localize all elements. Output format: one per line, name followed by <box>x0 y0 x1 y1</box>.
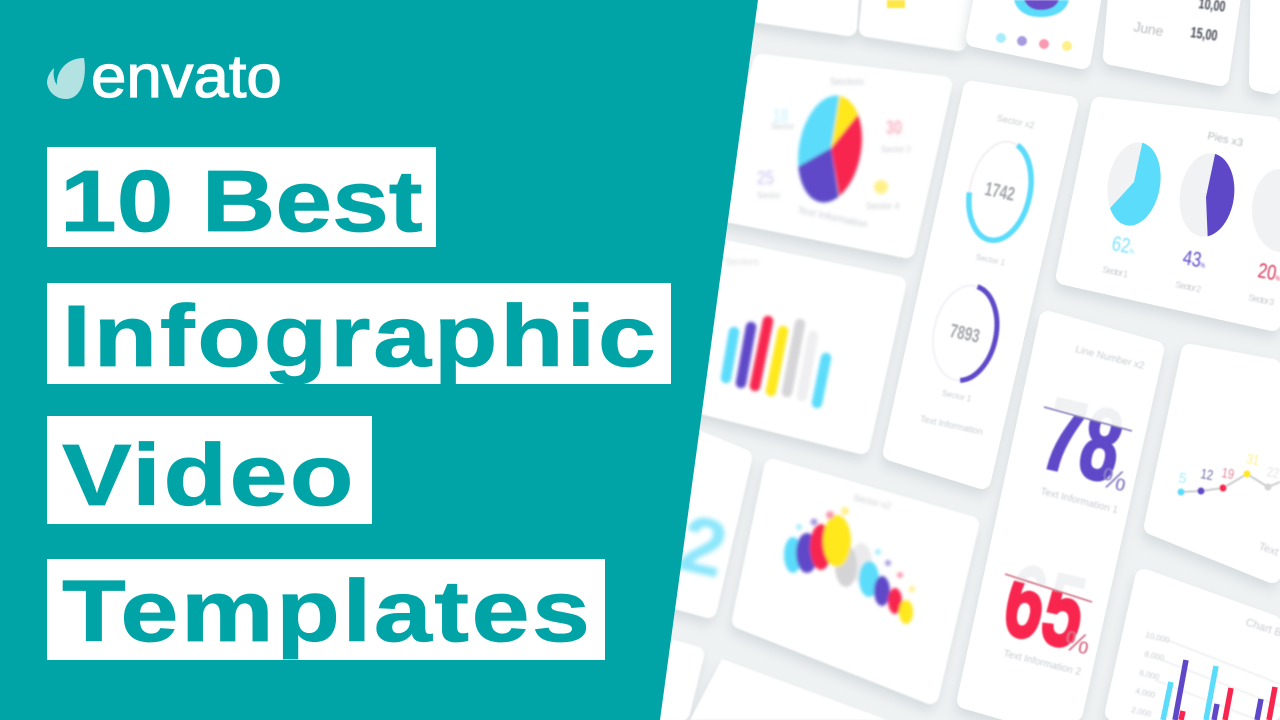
stat: 78 percent: Text Information 1 <box>1039 486 1119 516</box>
stat: 78 percent: Line Number x2 <box>1074 344 1146 372</box>
card with large number 22: 22 <box>628 488 735 595</box>
chart fragment: concentric arcs <box>1014 0 1069 17</box>
stat: 65 percent: Text Information 2 <box>1002 648 1082 678</box>
card shapes, left blurred column <box>640 0 970 720</box>
legend dots <box>996 33 1072 51</box>
stat: 78 percent: % <box>1099 462 1130 497</box>
pie labels: 18 <box>773 106 788 126</box>
pie labels: Sector 2 <box>881 145 911 154</box>
line <box>1181 474 1280 492</box>
pie values and labels <box>1102 130 1280 307</box>
chart fragment: yellow bar <box>887 0 905 8</box>
donut: purple 7893 <box>914 280 1012 437</box>
line chart values: 19 <box>1220 465 1235 482</box>
pie labels: Sector <box>771 122 794 131</box>
donut: purple 7893: Sector 1 <box>941 389 973 404</box>
line chart points <box>1178 470 1272 496</box>
top row card content <box>887 0 1227 51</box>
pie values and labels: 62% <box>1110 231 1137 258</box>
donut progress card <box>914 110 1045 437</box>
axis labels: 8,000 <box>1144 649 1166 663</box>
stat: 65 percent: % <box>1062 625 1093 660</box>
small bubble labels: Sector x2 <box>853 492 892 511</box>
line chart values <box>1177 451 1280 486</box>
pie values and labels: Pies x3 <box>1206 130 1244 149</box>
donut: cyan 1742: 1742 <box>983 179 1017 206</box>
table values <box>1132 0 1227 45</box>
chart fragment: inner arc <box>1024 0 1059 10</box>
pie labels: Sector 4 <box>866 201 900 211</box>
pie: 20 percent <box>1252 169 1280 252</box>
pie labels: Sectors <box>830 77 864 88</box>
grouped bar chart card <box>1131 616 1280 720</box>
pie values and labels: Sector 1 <box>1102 264 1129 279</box>
donut: purple 7893: Text Information <box>919 414 984 437</box>
axis labels: 4,000 <box>1135 686 1157 700</box>
logo: envato <box>47 44 282 111</box>
icon: leaf <box>47 58 85 99</box>
grid lines <box>1155 640 1280 719</box>
donut: cyan 1742: Sector 1 <box>975 253 1006 268</box>
bar card title: Sectors <box>725 257 759 268</box>
pie: 43 percent <box>1180 154 1234 236</box>
axis labels: 2,000 <box>1131 705 1153 719</box>
bar chart card <box>725 257 826 403</box>
stat: 78 percent <box>1042 346 1145 514</box>
line chart values: 12 <box>1199 466 1214 483</box>
pies x3 card <box>1100 130 1280 307</box>
table values: June <box>1132 18 1165 39</box>
line chart values: 5 <box>1177 469 1188 486</box>
pie values and labels: 20% <box>1256 258 1280 285</box>
pie labels <box>757 77 911 231</box>
pie chart <box>796 93 865 205</box>
table values: 15,00 <box>1189 24 1219 45</box>
pie labels: 25 <box>757 168 774 188</box>
pie labels: Text Information <box>796 205 868 231</box>
bars <box>726 321 826 403</box>
big number card <box>994 344 1146 678</box>
axis labels: 10,000 <box>1145 630 1171 645</box>
line chart values: 22 <box>1265 464 1280 481</box>
panel: blurred dashboard cards <box>628 0 1280 720</box>
heading: 10 Best: 10 Best <box>60 153 423 250</box>
line chart values: 31 <box>1245 451 1260 468</box>
donut: cyan 1742 <box>955 110 1045 270</box>
pie: 62 percent <box>1108 142 1161 226</box>
heading: Infographic: Infographic <box>62 288 656 385</box>
axis labels: 6,000 <box>1139 668 1161 682</box>
pie values and labels: Sector 2 <box>1175 279 1202 294</box>
stat: 78 percent: 78 <box>1033 375 1133 506</box>
axis labels <box>1131 616 1280 719</box>
pie labels: Sector <box>757 191 780 200</box>
stat: 65 percent <box>1004 566 1093 676</box>
line chart card <box>1177 451 1280 561</box>
donut: purple 7893: 7893 <box>948 321 982 348</box>
large bubbles <box>784 515 913 624</box>
stat: 65 percent: 65 <box>994 541 1096 672</box>
bars <box>1163 660 1275 720</box>
donut: cyan 1742: Sector x2 <box>996 113 1035 131</box>
pie values and labels: Sector 3 <box>1248 292 1275 307</box>
pie labels: 30 <box>886 118 902 139</box>
bubble chart card <box>784 492 915 624</box>
heading: Video: Video <box>62 427 354 524</box>
wordmark: envato <box>91 44 282 111</box>
pie values and labels: 43% <box>1181 245 1208 272</box>
panel: teal title panel <box>0 0 758 720</box>
stat: 65 percent: 65 <box>994 541 1096 672</box>
stat: 78 percent: 78 <box>1033 375 1133 506</box>
pie chart card <box>757 77 911 231</box>
card shapes, right column <box>892 0 1272 712</box>
heading: Templates: Templates <box>62 563 590 660</box>
